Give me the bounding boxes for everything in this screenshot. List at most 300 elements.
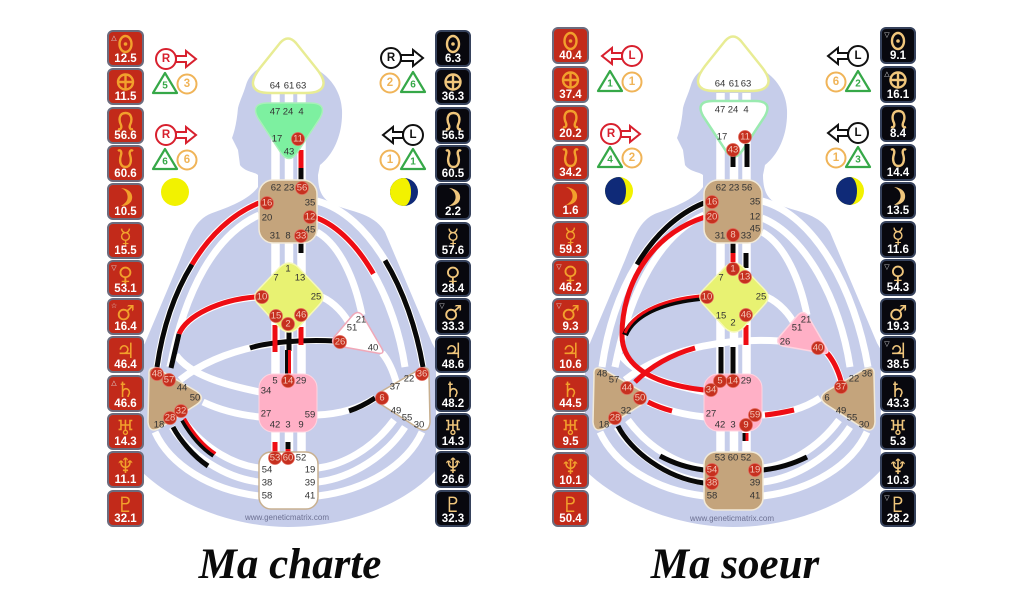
tile: pluto: 50.4 xyxy=(559,513,582,525)
badges 4 and 2: chart 2: 2 xyxy=(629,152,635,164)
tile: sun xyxy=(436,31,470,66)
planet column: chart 1 design (red) xyxy=(108,31,143,526)
center: G, chart 1 xyxy=(255,263,323,332)
center: throat, chart 1: 33 xyxy=(296,230,306,242)
tile: saturn: △ xyxy=(111,379,117,387)
center: root, chart 2: 19 xyxy=(750,464,760,476)
center: ajna, chart 1: 24 xyxy=(283,106,293,118)
website credit: chart 1: www.geneticmatrix.com xyxy=(244,513,329,522)
center: head, chart 2 xyxy=(698,36,769,91)
tile: venus: 54.3 xyxy=(887,282,909,294)
center: ajna, chart 1: 47 xyxy=(270,106,280,118)
center: root, chart 1: 41 xyxy=(305,490,315,502)
center: sacral, chart 2: 29 xyxy=(741,376,751,386)
center: G, chart 2: 25 xyxy=(756,292,766,302)
center: solar plexus, chart 1: 22 xyxy=(404,374,414,384)
center: root, chart 2: 53 xyxy=(715,452,725,464)
tile: mars: 19.3 xyxy=(887,321,909,333)
center: ego, chart 2: 26 xyxy=(780,336,790,348)
center: head, chart 1 xyxy=(253,38,324,93)
center: G, chart 2: 13 xyxy=(740,272,750,282)
tile: sun: 6.3 xyxy=(445,53,461,65)
tile: moon xyxy=(436,184,470,219)
tile: saturn xyxy=(881,376,915,411)
center: solar plexus, chart 1: 49 xyxy=(391,406,401,416)
center: throat, chart 1: 16 xyxy=(262,198,272,208)
tile: uranus xyxy=(553,414,588,449)
badges 6 and 6: chart 1 xyxy=(153,149,196,170)
center: throat, chart 2: 8 xyxy=(730,230,736,240)
center: throat, chart 2: 33 xyxy=(741,230,751,242)
planet column: chart 2 design (red) xyxy=(553,28,588,526)
tile: uranus: ♅ xyxy=(444,416,462,440)
channel network: chart 2 xyxy=(600,93,868,496)
tile: south node: 34.2 xyxy=(559,167,582,179)
tile: moon: 1.6 xyxy=(562,205,578,217)
tile: venus: ♀ xyxy=(563,262,578,286)
center: G, chart 1: 2 xyxy=(285,318,291,330)
tile: south node: 60.5 xyxy=(442,168,465,180)
tile: sun xyxy=(881,28,915,63)
center: throat, chart 1: 62 xyxy=(271,182,281,194)
center: spleen, chart 1: 32 xyxy=(176,406,186,416)
tile: pluto: 32.1 xyxy=(114,513,137,525)
center: root, chart 2: 58 xyxy=(707,490,717,502)
center: G, chart 1: 10 xyxy=(257,292,267,302)
center: throat, chart 1: 45 xyxy=(305,224,315,236)
tile: jupiter: ♃ xyxy=(444,339,462,363)
badges 1 and 1: chart 2: 1 xyxy=(629,76,636,88)
tile: uranus: ♅ xyxy=(561,416,580,440)
badges 6 and 2: chart 2: 6 xyxy=(833,76,839,88)
arrow L red: chart 2 xyxy=(602,46,642,66)
center: G, chart 1: 46 xyxy=(296,310,306,320)
tile: jupiter: ♃ xyxy=(116,339,135,363)
center: sacral, chart 2: 42 xyxy=(715,420,725,430)
arrow L red: chart 2: L xyxy=(628,50,636,62)
tile: neptune: ♆ xyxy=(561,455,580,479)
tile: mars: ☆ xyxy=(111,302,117,310)
tile: neptune: ♆ xyxy=(444,454,462,478)
tile: earth xyxy=(881,67,915,102)
badges 6 and 6: chart 1: 6 xyxy=(184,154,190,166)
center: ego, chart 1: 40 xyxy=(368,342,378,354)
center: root, chart 2: 38 xyxy=(707,478,717,488)
tile: mars: 9.3 xyxy=(562,321,578,333)
badges 1 and 1: chart 1 xyxy=(380,149,425,170)
center: sacral, chart 2: 14 xyxy=(728,376,738,386)
center: solar plexus, chart 1: 30 xyxy=(414,420,424,430)
tile: moon xyxy=(881,183,915,218)
arrow R red lower: chart 1 xyxy=(156,125,196,145)
tile: north node: 56.5 xyxy=(442,130,465,142)
tile: mercury: 57.6 xyxy=(442,245,464,257)
tile: mars: ▽ xyxy=(439,302,445,310)
website credit: chart 2: www.geneticmatrix.com xyxy=(689,514,774,523)
center: root, chart 1: 58 xyxy=(262,490,272,502)
arrow R black: chart 1 xyxy=(381,48,423,68)
center: throat, chart 1: 23 xyxy=(284,182,294,194)
arrow R red top: chart 1: R xyxy=(162,53,171,65)
center: ajna, chart 2: 43 xyxy=(728,144,738,156)
tile: earth xyxy=(108,69,143,104)
tile: neptune: ♆ xyxy=(116,454,135,478)
arrow L black lower: chart 2: L xyxy=(854,127,862,139)
center: sacral, chart 1: 14 xyxy=(283,376,293,386)
arrow L black lower: chart 2 xyxy=(828,123,868,143)
badges 1 and 1: chart 2 xyxy=(598,71,642,92)
tile: neptune: 26.6 xyxy=(442,474,464,486)
center: G, chart 1: 13 xyxy=(295,272,305,284)
center: solar plexus, chart 2: 36 xyxy=(862,368,872,380)
tile: north node: 56.6 xyxy=(114,130,137,142)
center: G, chart 2: 2 xyxy=(730,318,736,328)
arrow R red: chart 2: R xyxy=(607,128,616,140)
center: throat, chart 2 xyxy=(704,180,762,243)
center: throat, chart 2: 56 xyxy=(742,182,752,194)
tile: mercury xyxy=(108,223,143,258)
tile: mars: ♂ xyxy=(116,301,135,325)
center: throat, chart 2: 35 xyxy=(750,196,760,208)
arrow L black top: chart 2: L xyxy=(854,50,862,62)
center: sacral, chart 1: 5 xyxy=(272,376,278,386)
tile: venus xyxy=(436,261,470,296)
tile: south node: 14.4 xyxy=(887,167,910,179)
tile: pluto: ♇ xyxy=(889,493,907,517)
center: sacral, chart 1: 27 xyxy=(261,408,271,420)
badges 6 and 2: chart 2 xyxy=(826,71,870,92)
center: root, chart 1: 39 xyxy=(305,478,315,488)
center: root, chart 2: 60 xyxy=(728,452,738,464)
center: spleen, chart 1 xyxy=(148,368,202,430)
center: solar plexus, chart 1 xyxy=(376,368,430,430)
center: ego, chart 2: 40 xyxy=(813,342,823,354)
center: root, chart 2: 41 xyxy=(750,490,760,502)
channel activations: chart 2 xyxy=(618,203,841,483)
tile: venus: ♀ xyxy=(445,263,461,287)
center: root, chart 1: 54 xyxy=(262,464,272,476)
tile: south node xyxy=(881,145,915,180)
tile: pluto xyxy=(436,491,470,526)
arrow R red lower: chart 1: R xyxy=(162,129,171,141)
center: root, chart 1 xyxy=(259,452,318,509)
center: ajna, chart 1 xyxy=(256,103,322,158)
tile: north node xyxy=(881,106,915,141)
tile: moon: 13.5 xyxy=(887,205,910,217)
tile: pluto: ♇ xyxy=(444,493,462,517)
center: solar plexus, chart 2: 55 xyxy=(847,412,857,424)
channel network: chart 1 xyxy=(155,93,423,496)
tile: earth: 11.5 xyxy=(115,91,137,103)
center: head, chart 2: 63 xyxy=(741,78,751,90)
tile: mercury: ☿ xyxy=(119,225,132,249)
badges 6 and 2: chart 2: 2 xyxy=(855,78,861,90)
arrow R red: chart 2 xyxy=(601,124,640,144)
planet column: chart 2 personality (black) xyxy=(881,28,915,526)
badges 1 and 3: chart 2: 3 xyxy=(855,154,861,166)
tile: south node xyxy=(108,146,143,181)
tile: venus: 28.4 xyxy=(442,283,465,295)
tile: neptune: 11.1 xyxy=(115,474,137,486)
badges 4 and 2: chart 2 xyxy=(598,147,642,168)
tile: pluto xyxy=(553,491,588,526)
center: throat, chart 1 xyxy=(259,180,317,243)
center: throat, chart 2: 12 xyxy=(750,212,760,222)
center: G, chart 2: 46 xyxy=(741,310,751,320)
center: solar plexus, chart 1: 36 xyxy=(417,368,427,380)
center: root, chart 2 xyxy=(704,452,763,510)
badges 2 and 6: chart 1: 2 xyxy=(387,77,393,89)
tile: uranus: 14.3 xyxy=(114,436,137,448)
center: throat, chart 1: 35 xyxy=(305,198,315,208)
center: throat, chart 2: 31 xyxy=(715,230,725,242)
tile: jupiter xyxy=(436,337,470,372)
tile: saturn: 43.3 xyxy=(887,398,909,410)
tile: venus: ♀ xyxy=(118,263,133,287)
tile: pluto: ▽ xyxy=(884,494,890,502)
badges 1 and 3: chart 2 xyxy=(826,147,870,168)
center: throat, chart 1: 12 xyxy=(305,212,315,222)
center: solar plexus, chart 1: 37 xyxy=(390,382,400,392)
tile: venus: ▽ xyxy=(884,263,890,271)
center: throat, chart 1: 20 xyxy=(262,212,272,224)
tile: uranus xyxy=(436,414,470,449)
center: sacral, chart 2: 59 xyxy=(750,410,760,420)
tile: earth xyxy=(553,67,588,102)
tile: saturn xyxy=(436,376,470,411)
tile: jupiter: 48.6 xyxy=(442,359,464,371)
tile: jupiter xyxy=(881,337,915,372)
tile: mercury: ☿ xyxy=(447,225,459,249)
tile: mercury: 11.6 xyxy=(887,244,909,256)
tile: north node: 8.4 xyxy=(890,128,907,140)
badges 1 and 1: chart 2: 1 xyxy=(607,78,613,90)
center: ajna, chart 2: 47 xyxy=(715,104,725,116)
center: solar plexus, chart 2: 22 xyxy=(849,374,859,384)
tile: sun: △ xyxy=(111,34,117,42)
tile: saturn: ♄ xyxy=(116,378,135,402)
tile: moon: 2.2 xyxy=(445,206,461,218)
center: head, chart 1: 61 xyxy=(284,80,294,92)
center: throat, chart 2: 45 xyxy=(750,224,760,234)
center: G, chart 2 xyxy=(700,262,768,332)
badges 1 and 3: chart 2: 1 xyxy=(833,152,840,164)
tile: sun xyxy=(108,31,143,66)
center: throat, chart 2: 20 xyxy=(707,212,717,222)
center: sacral, chart 2: 5 xyxy=(717,376,723,386)
center: root, chart 2: 39 xyxy=(750,478,760,488)
center: throat, chart 2: 62 xyxy=(716,182,726,194)
center: spleen, chart 2: 32 xyxy=(621,406,631,416)
center: sacral, chart 1: 59 xyxy=(305,410,315,420)
tile: mars: 33.3 xyxy=(442,321,464,333)
tile: jupiter: ▽ xyxy=(884,340,890,348)
center: G, chart 1: 7 xyxy=(273,272,279,284)
center: ego, chart 1: 21 xyxy=(356,314,366,326)
badges 5 and 3: chart 1: 3 xyxy=(184,78,190,90)
personality moon phase: chart 1 xyxy=(390,178,418,206)
tile: jupiter xyxy=(108,337,143,372)
tile: neptune xyxy=(553,453,588,488)
center: sacral, chart 2: 3 xyxy=(730,420,736,430)
tile: pluto: 28.2 xyxy=(887,513,909,525)
arrow R red top: chart 1 xyxy=(156,49,196,69)
personality moon phase: chart 2 xyxy=(836,177,864,205)
tile: earth: 36.3 xyxy=(442,91,464,103)
center: spleen, chart 2: 48 xyxy=(597,368,607,380)
center: spleen, chart 1: 44 xyxy=(177,382,187,394)
center: ajna, chart 1: 11 xyxy=(293,134,303,144)
tile: jupiter: ♃ xyxy=(561,339,580,363)
center: solar plexus, chart 2: 37 xyxy=(836,382,846,392)
center: root, chart 1: 53 xyxy=(270,452,280,464)
tile: jupiter: ♃ xyxy=(889,339,907,363)
center: spleen, chart 1: 57 xyxy=(164,374,174,386)
center: solar plexus, chart 1: 55 xyxy=(402,412,412,424)
center: sacral, chart 1: 3 xyxy=(285,420,291,430)
tile: uranus: 14.3 xyxy=(442,436,464,448)
center: spleen, chart 1: 50 xyxy=(190,392,200,404)
center: ego, chart 1: 26 xyxy=(335,336,345,348)
center: head, chart 1: 64 xyxy=(270,80,280,92)
planet column: chart 1 personality (black) xyxy=(436,31,470,526)
center: sacral, chart 1: 29 xyxy=(296,376,306,386)
tile: earth xyxy=(436,69,470,104)
tile: uranus: 5.3 xyxy=(890,436,906,448)
badges 1 and 1: chart 1: 1 xyxy=(410,156,416,168)
tile: jupiter: 46.4 xyxy=(114,359,137,371)
tile: neptune xyxy=(436,452,470,487)
center: solar plexus, chart 2: 49 xyxy=(836,406,846,416)
center: spleen, chart 2: 18 xyxy=(599,420,609,430)
center: G, chart 1: 15 xyxy=(271,310,281,322)
center: G, chart 2: 7 xyxy=(718,272,724,284)
arrow L black: chart 1 xyxy=(383,125,423,145)
center: ajna, chart 1: 4 xyxy=(298,106,304,118)
center: ajna, chart 1: 17 xyxy=(272,134,282,144)
center: spleen, chart 2: 57 xyxy=(609,374,619,386)
tile: pluto xyxy=(108,491,143,526)
center: spleen, chart 2 xyxy=(593,368,646,430)
center: sacral, chart 2: 9 xyxy=(743,420,749,430)
tile: north node: 20.2 xyxy=(559,128,582,140)
center: ajna, chart 2 xyxy=(701,101,767,167)
tile: jupiter: 38.5 xyxy=(887,359,910,371)
tile: jupiter xyxy=(553,337,588,372)
tile: venus: 46.2 xyxy=(559,282,582,294)
center: ajna, chart 2: 17 xyxy=(717,132,727,142)
tile: venus: ▽ xyxy=(556,263,562,271)
tile: venus xyxy=(553,260,588,295)
tile: pluto: 32.3 xyxy=(442,513,464,525)
badges 2 and 6: chart 1 xyxy=(380,72,425,92)
center: sacral, chart 2: 34 xyxy=(706,384,716,396)
tile: mars: ♂ xyxy=(561,301,580,325)
tile: saturn: 44.5 xyxy=(559,398,582,410)
tile: saturn: ♄ xyxy=(889,378,907,402)
tile: earth: 37.4 xyxy=(559,89,582,101)
tile: mercury: ☿ xyxy=(564,224,577,248)
arrow L black top: chart 2 xyxy=(828,46,868,66)
tile: mars xyxy=(881,299,915,334)
center: ajna, chart 2: 11 xyxy=(740,132,750,142)
tile: neptune: 10.3 xyxy=(887,475,909,487)
tile: moon: 10.5 xyxy=(114,206,137,218)
center: G, chart 2: 10 xyxy=(702,292,712,302)
center: solar plexus, chart 2 xyxy=(822,368,875,430)
channel activations: chart 1 xyxy=(157,150,423,466)
center: G, chart 2: 15 xyxy=(716,310,726,322)
tile: pluto xyxy=(881,491,915,526)
tile: uranus xyxy=(881,414,915,449)
center: spleen, chart 2: 44 xyxy=(622,382,632,394)
tile: venus: ♀ xyxy=(890,262,906,286)
center: sacral, chart 2 xyxy=(704,374,762,432)
center: sacral, chart 1: 34 xyxy=(261,386,271,396)
arrow R black: chart 1: R xyxy=(387,52,396,64)
center: throat, chart 2: 16 xyxy=(707,196,717,208)
arrow L black: chart 1: L xyxy=(409,129,417,141)
tile: mercury: 15.5 xyxy=(114,245,137,257)
tile: sun: 9.1 xyxy=(890,50,907,62)
center: G, chart 2: 1 xyxy=(730,264,736,274)
center: ego, chart 2 xyxy=(778,312,828,354)
title: Ma charte: Ma charte xyxy=(198,541,381,588)
badges 6 and 6: chart 1: 6 xyxy=(162,156,168,168)
tile: saturn: ♄ xyxy=(561,378,580,402)
tile: moon xyxy=(553,183,588,218)
center: G, chart 1: 1 xyxy=(285,264,291,274)
tile: venus: ▽ xyxy=(111,264,117,272)
tile: jupiter: 10.6 xyxy=(559,359,582,371)
tile: mars xyxy=(553,299,588,334)
center: throat, chart 1: 31 xyxy=(270,230,280,242)
tile: mercury: 59.3 xyxy=(559,244,582,256)
center: spleen, chart 1: 18 xyxy=(154,420,164,430)
tile: venus xyxy=(881,260,915,295)
design moon phase: chart 1 xyxy=(161,178,189,206)
tile: mars xyxy=(436,299,470,334)
center: throat, chart 1: 8 xyxy=(285,230,291,242)
tile: pluto: ♇ xyxy=(116,493,135,517)
badges 2 and 6: chart 1: 6 xyxy=(410,80,416,90)
tile: mars: ♂ xyxy=(889,301,907,325)
center: spleen, chart 2: 28 xyxy=(610,412,620,424)
center: spleen, chart 1: 48 xyxy=(152,368,162,380)
tile: mercury: ☿ xyxy=(892,224,904,248)
center: root, chart 2: 54 xyxy=(707,464,717,476)
center: head, chart 2: 64 xyxy=(715,78,725,90)
center: ego, chart 2: 21 xyxy=(801,314,811,326)
center: sacral, chart 1: 9 xyxy=(298,420,304,430)
badges 4 and 2: chart 2: 4 xyxy=(607,154,613,166)
tile: neptune xyxy=(881,453,915,488)
center: ajna, chart 2: 24 xyxy=(728,104,738,116)
tile: north node xyxy=(436,108,470,143)
tile: saturn: 48.2 xyxy=(442,398,464,410)
tile: uranus: ♅ xyxy=(889,416,907,440)
center: throat, chart 2: 23 xyxy=(729,182,739,194)
center: root, chart 2: 52 xyxy=(741,452,751,464)
tile: mercury xyxy=(436,223,470,258)
tile: pluto: ♇ xyxy=(561,493,580,517)
body silhouette: chart 2 xyxy=(585,62,881,527)
tile: earth: △ xyxy=(884,70,890,78)
tile: sun: 12.5 xyxy=(114,53,137,65)
tile: sun xyxy=(553,28,588,63)
tile: sun: ▽ xyxy=(884,31,890,39)
tile: neptune: 10.1 xyxy=(559,475,582,487)
